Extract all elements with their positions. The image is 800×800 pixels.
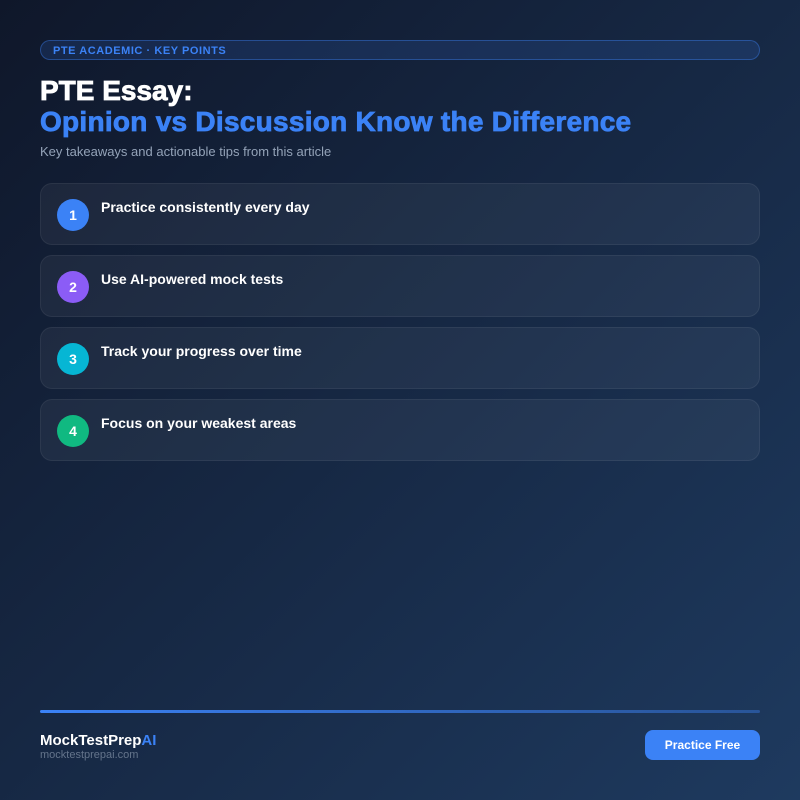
tip 3 text: Track your progress over time [101,343,302,359]
icon: number 1 [57,199,89,231]
icon: number 2: 2 [69,279,77,295]
panel: tip 3 [40,327,760,389]
badge: PTE Academic key points: PTE ACADEMIC · KEY POINTS [53,45,226,57]
panel: tip 4 [40,399,760,461]
title: Opinion vs Discussion Know the Difference [40,106,631,137]
tip 1 text: Practice consistently every day [101,199,310,215]
icon: number 3: 3 [69,351,77,367]
icon: number 4 [57,415,89,447]
title: PTE Essay: [40,75,193,106]
panel: tip 1 [40,183,760,245]
tip 4 text: Focus on your weakest areas [101,415,296,431]
icon: number 2 [57,271,89,303]
tip 2 text: Use AI-powered mock tests [101,271,283,287]
button: Practice Free: Practice Free [665,738,740,752]
panel: tip 2 [40,255,760,317]
brand block [40,732,156,761]
brand url: mocktestprepai.com [40,749,138,761]
icon: number 3 [57,343,89,375]
icon: number 4: 4 [69,423,77,439]
title [40,75,631,138]
subtitle: Key takeaways and actionable tips from this article [40,144,331,159]
icon: number 1: 1 [69,207,77,223]
badge: PTE Academic key points [40,40,760,60]
button: Practice Free [645,730,760,760]
brand name: MockTestPrepAI [40,732,156,749]
